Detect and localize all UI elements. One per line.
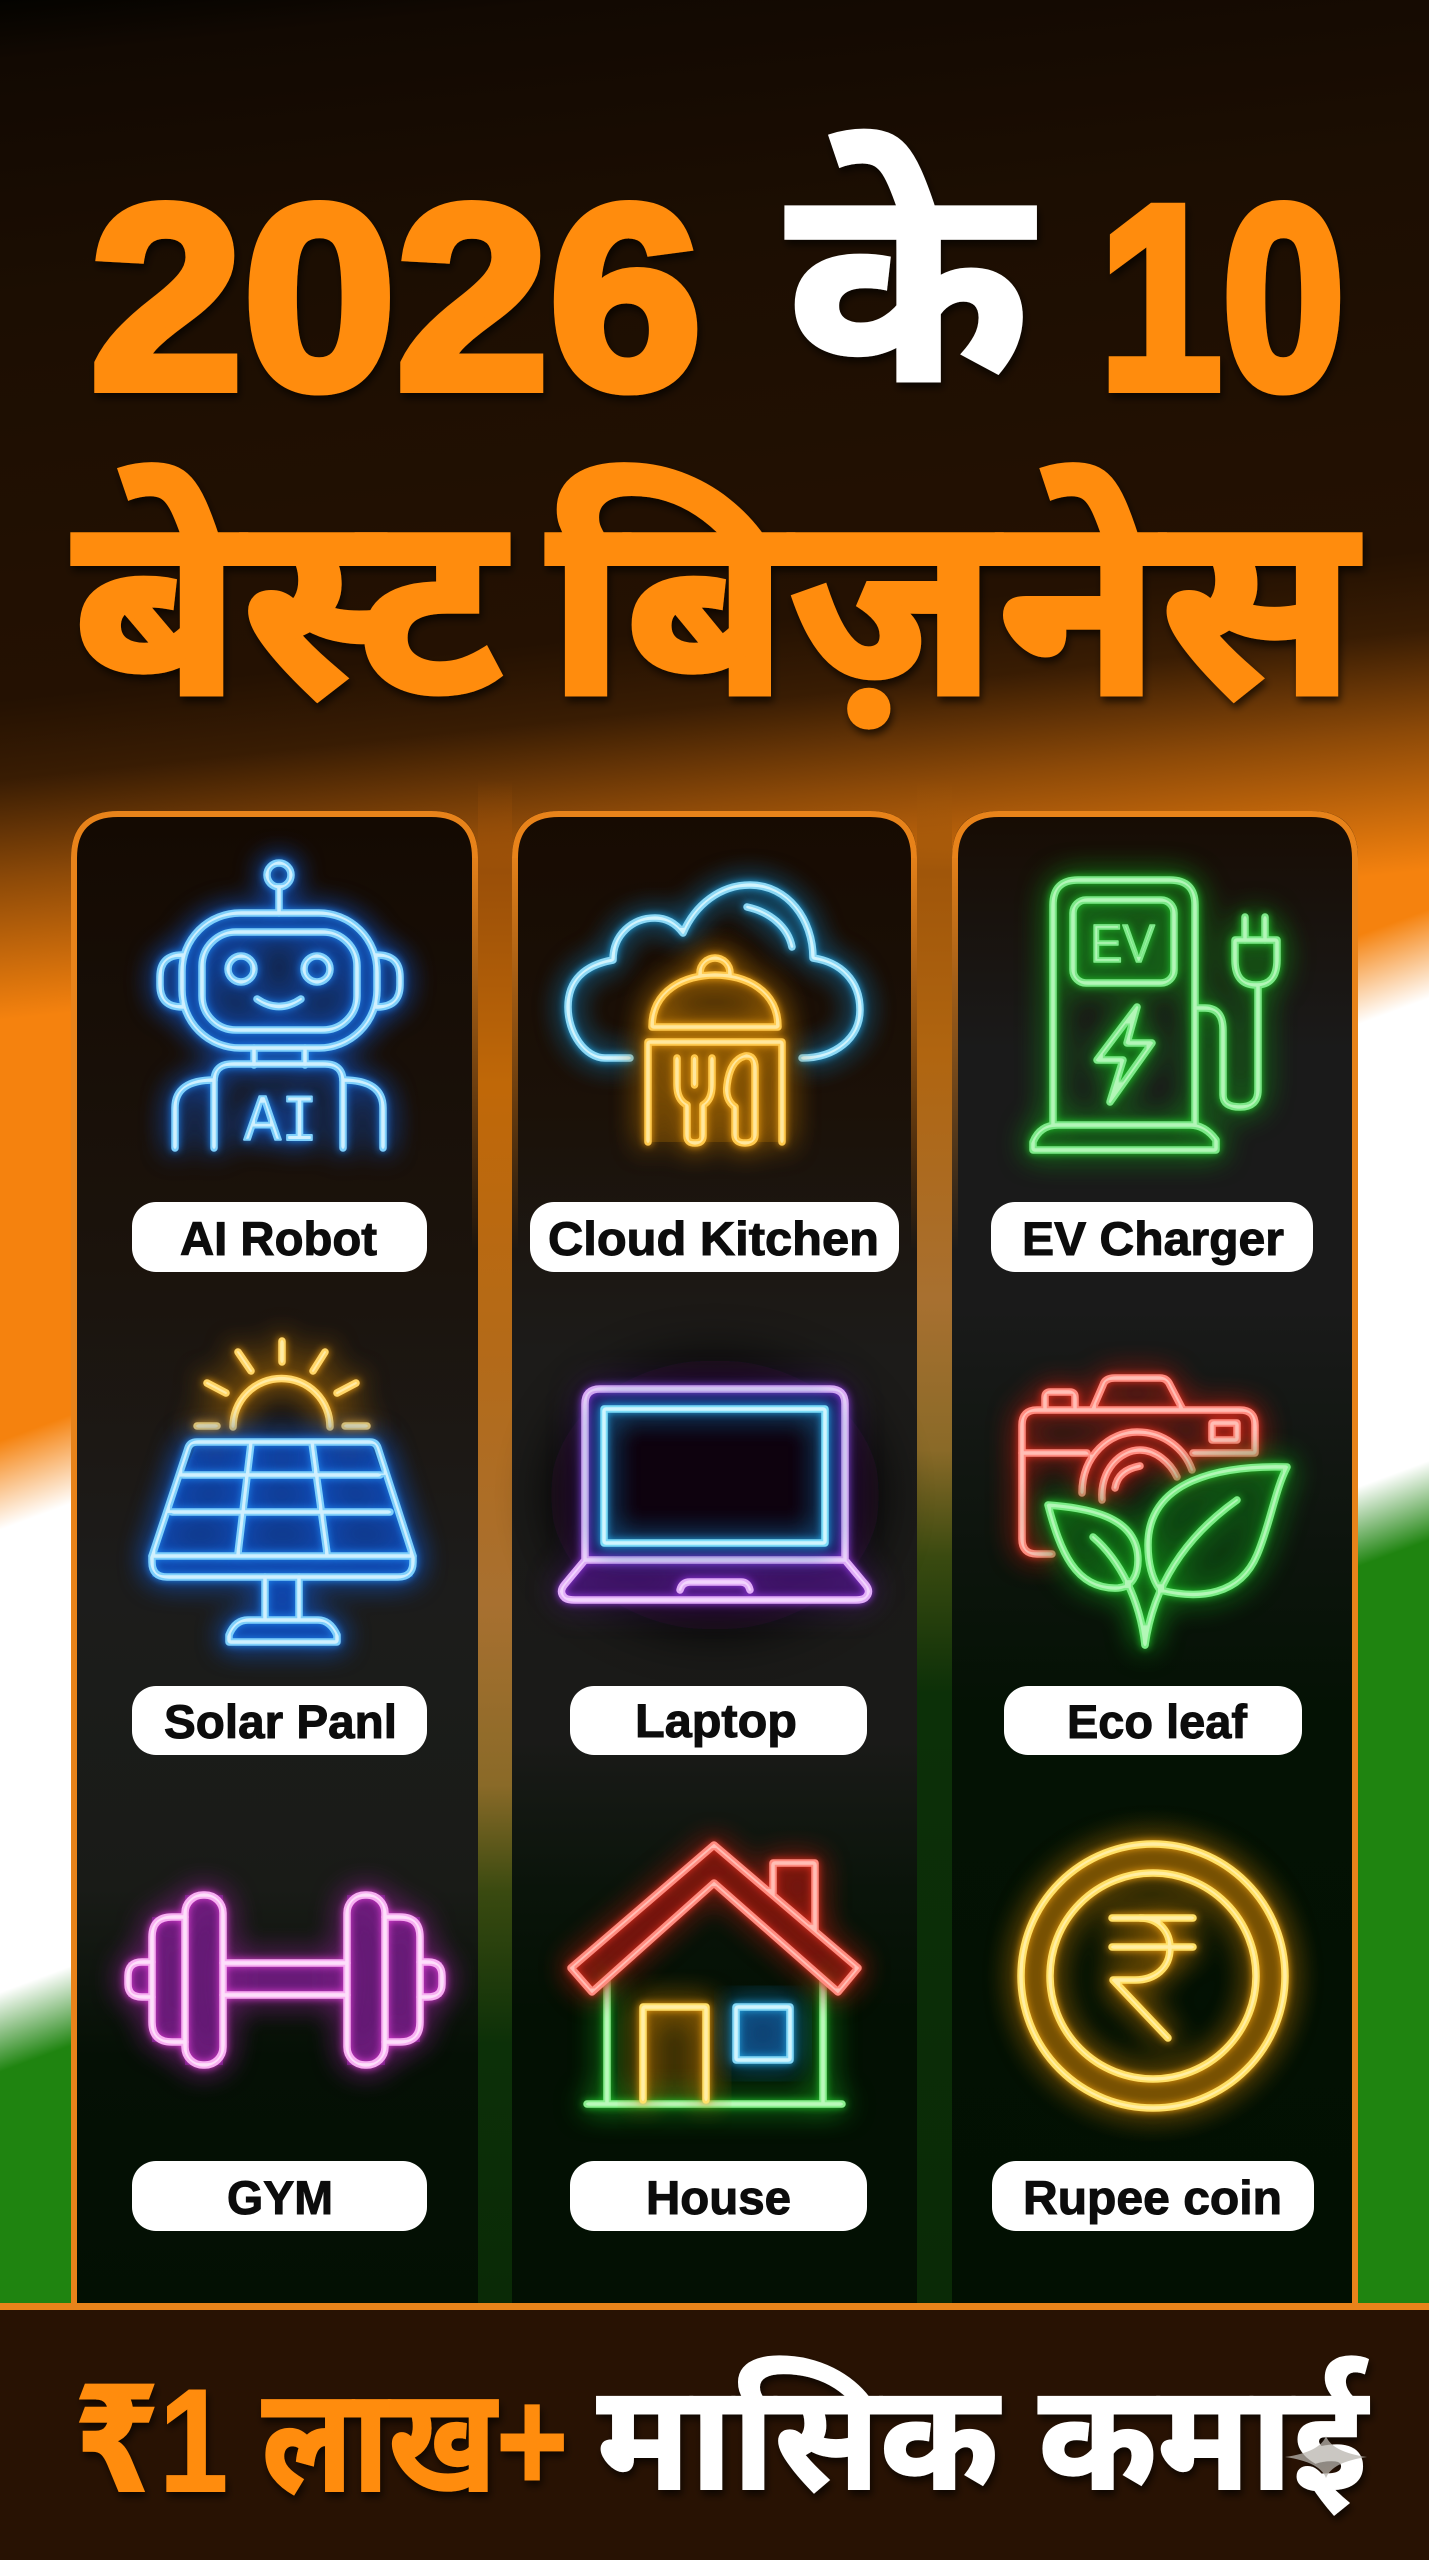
icon: watermark sparkle [1285,2436,1367,2478]
label: Rupee coin: Rupee coin [1023,2171,1282,2224]
icon: camera and eco leaf [1022,1378,1287,1645]
label: Laptop [570,1686,867,1755]
icon: EV charger [1033,880,1277,1150]
label: Solar Panl: Solar Panl [164,1695,397,1748]
label: GYM: GYM [227,2171,333,2224]
panel: column 1 [71,811,478,2310]
icon: laptop [550,1360,880,1630]
label: Laptop: Laptop [635,1694,797,1747]
icon: house [571,1845,858,2104]
icon: AI robot [160,863,400,1160]
label: GYM [132,2161,427,2231]
title line 1: 10: 10 [1099,151,1345,444]
label: AI Robot [132,1202,427,1272]
title [73,127,1360,749]
title line 2: बिज़नेस: बिज़नेस [547,463,1360,749]
icon: AI robot: AI [244,1085,318,1160]
panel: column 2 [512,811,917,2310]
label: EV Charger: EV Charger [1022,1212,1284,1265]
label: Cloud Kitchen: Cloud Kitchen [548,1212,879,1265]
label: House: House [646,2171,791,2224]
title line 2: बेस्ट: बेस्ट [73,463,509,749]
label: Rupee coin [992,2161,1314,2231]
icon: rupee coin [1021,1844,1285,2108]
title line 1: के: के [786,127,1040,441]
title line 1: 2026: 2026 [90,151,702,444]
icon: cloud kitchen [568,885,860,1143]
footer text: income amount: ₹1 लाख+ [74,2356,568,2526]
panel: column 3 [952,811,1358,2310]
label: EV Charger [991,1202,1313,1272]
label: Cloud Kitchen [530,1202,899,1272]
label: House [570,2161,867,2231]
label: Solar Panl [132,1686,427,1755]
label: AI Robot: AI Robot [180,1212,377,1265]
icon: EV charger: EV [1090,914,1155,974]
label: Eco leaf [1004,1686,1302,1755]
label: Eco leaf: Eco leaf [1067,1695,1247,1748]
icon: solar panel with sun [152,1341,413,1642]
icon: dumbbell [128,1895,442,2065]
footer banner [0,2303,1429,2560]
footer text: monthly earning: मासिक कमाई [597,2356,1370,2521]
